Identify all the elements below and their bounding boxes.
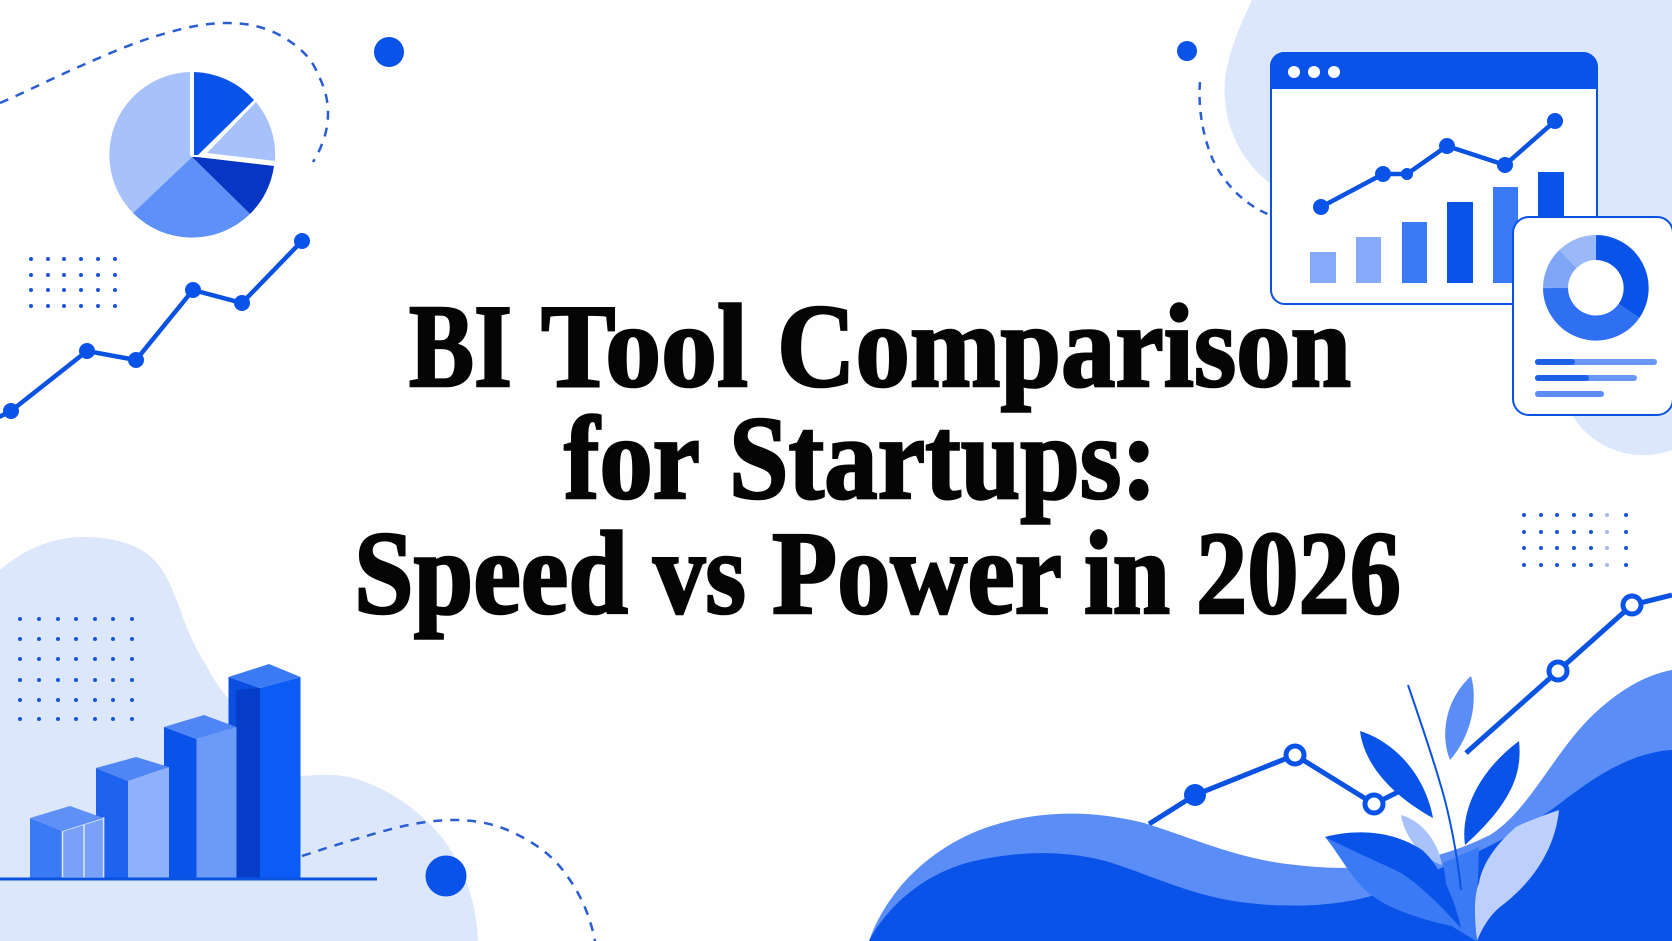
- decoration: top-left dashed curve: [0, 23, 328, 162]
- background blob: top right: [1225, 0, 1672, 455]
- bar 2: [96, 757, 169, 878]
- dashboard window: [1270, 52, 1597, 304]
- dot grid: right: [1522, 513, 1628, 567]
- report card: [1513, 217, 1672, 415]
- bar 4: [228, 664, 300, 878]
- pie slice: light wedge: [207, 102, 275, 161]
- chart baseline: [0, 878, 377, 880]
- decoration: top-right dot: [1177, 41, 1197, 61]
- leaf: upper right: [1464, 741, 1520, 845]
- pie slice: darkest: [192, 157, 274, 214]
- title: [354, 280, 1401, 639]
- leaf: upper left: [1360, 731, 1433, 818]
- decoration: bottom dot: [426, 856, 466, 896]
- decoration: top-left dot: [374, 37, 404, 67]
- title: in: [1084, 507, 1170, 639]
- title: Power: [772, 507, 1060, 639]
- title: Speed: [354, 507, 628, 639]
- title: Tool: [541, 280, 748, 412]
- bar 3: [164, 715, 236, 878]
- window frame: [1271, 53, 1597, 304]
- title: Comparison: [777, 280, 1351, 412]
- title: 2026: [1196, 507, 1401, 639]
- title: vs: [653, 507, 746, 639]
- decoration: bottom dashed curve: [302, 820, 595, 941]
- pie slice: top dark: [194, 72, 254, 155]
- stem area: [1443, 847, 1479, 941]
- window line chart: [1313, 113, 1563, 215]
- bar 1: [30, 806, 104, 878]
- title: BI: [409, 280, 512, 412]
- window buttons: [1288, 66, 1340, 78]
- bottom-right line chart: right segment: [1466, 595, 1672, 753]
- line chart: left: [0, 233, 310, 419]
- pie slice: large light: [109, 72, 192, 213]
- title: for: [564, 392, 698, 524]
- dot grid: top left: [29, 257, 117, 308]
- plant: [1325, 676, 1559, 941]
- bottom-right line chart: left segment: [1149, 746, 1400, 824]
- bars: [1310, 172, 1564, 283]
- plant stem: [1408, 685, 1461, 890]
- leaf: large right pale: [1475, 810, 1559, 941]
- 3D bar chart: [0, 664, 377, 879]
- card frame: [1513, 217, 1672, 415]
- decoration: top-right dashed arc: [1200, 82, 1270, 215]
- donut chart: [1556, 248, 1636, 328]
- background blob: bottom left: [0, 537, 478, 941]
- title: Startups:: [729, 392, 1157, 524]
- wave: front layer: [869, 750, 1672, 941]
- dot grid: bottom left: [18, 617, 134, 721]
- pie chart: [109, 72, 275, 238]
- leaf: small pale: [1401, 815, 1442, 865]
- leaf: large left: [1325, 832, 1461, 928]
- card text lines: [1535, 359, 1657, 397]
- wave: back layer: [869, 670, 1672, 941]
- pie slice: medium: [133, 157, 250, 238]
- window header: [1270, 52, 1597, 89]
- leaf: top: [1445, 676, 1474, 760]
